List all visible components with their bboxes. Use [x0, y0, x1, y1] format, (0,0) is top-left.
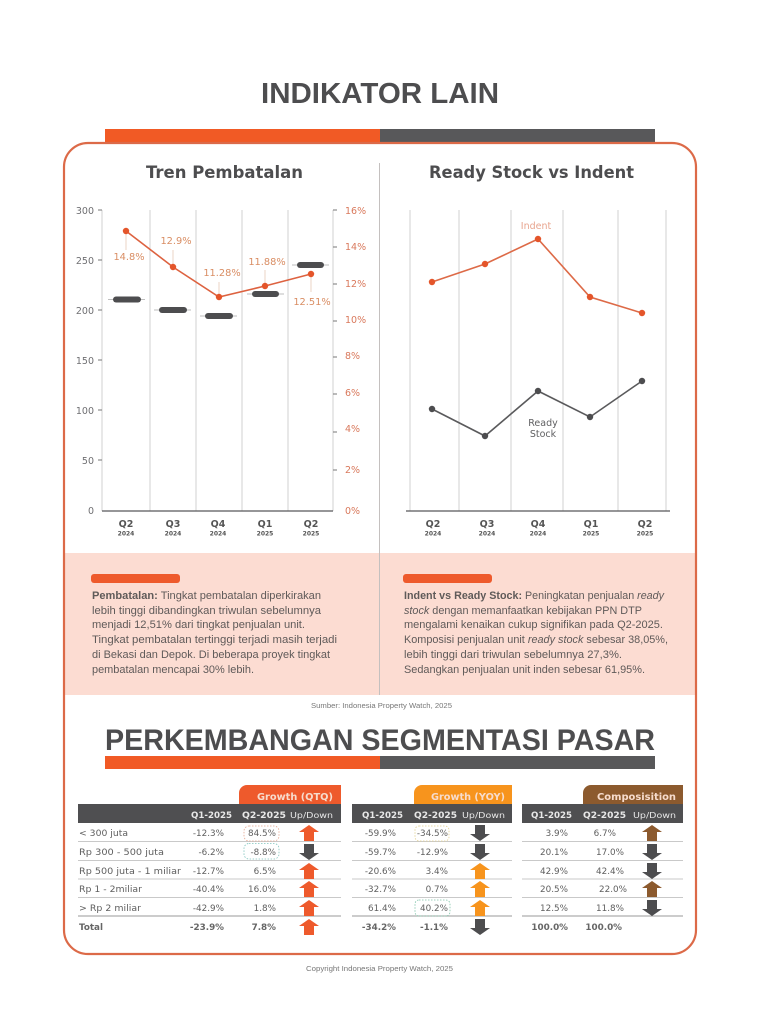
cancellation rate line — [123, 228, 314, 300]
Q1 values: -12.3% — [193, 829, 224, 839]
label: Ready Stock — [528, 418, 558, 440]
heading: Ready Stock vs Indent: Ready Stock vs Indent — [429, 163, 634, 183]
Q1 values: -34.2% — [362, 923, 396, 933]
Q2 values: 3.4% — [426, 867, 448, 877]
x axis labels: 2025 — [637, 530, 653, 538]
Q1 values: 12.5% — [540, 904, 568, 914]
tab: Composisition: Composisition — [597, 792, 676, 803]
x axis labels: 2024 — [479, 530, 495, 538]
Q2 values: 11.8% — [596, 904, 624, 914]
text block: Indent vs Ready Stock: Sedangkan penjualan unit inden sebesar 61,95%. — [404, 664, 645, 676]
unit bars — [113, 262, 324, 319]
Q2 values: -8.8% — [250, 848, 276, 858]
Q2 values: -12.9% — [417, 848, 448, 858]
left axis labels: 0 — [88, 506, 94, 517]
Q2 values: -34.5% — [417, 829, 448, 839]
left axis labels: 100 — [76, 406, 94, 417]
x axis labels: Q4 — [211, 519, 226, 530]
x axis labels: Q1 — [584, 519, 598, 530]
left axis labels: 300 — [76, 206, 94, 217]
tab: Growth (YOY): Growth (YOY) — [431, 792, 505, 803]
chart: Tren Pembatalan — [76, 206, 366, 538]
right axis labels: 2% — [345, 465, 360, 476]
text block: Pembatalan: Tingkat pembatalan tertinggi terjadi masih terjadi — [92, 634, 337, 646]
data labels: 12.9% — [160, 236, 192, 247]
Q1 values: 100.0% — [531, 923, 568, 933]
right axis labels: 14% — [345, 242, 366, 253]
Q1 values: 42.9% — [540, 867, 568, 877]
table header — [522, 804, 683, 823]
Q2 values: 84.5% — [248, 829, 276, 839]
Q2 values: 1.8% — [254, 904, 276, 914]
row labels: Total — [79, 923, 103, 933]
table header: Up/Down — [633, 811, 676, 820]
data labels: 11.88% — [248, 257, 286, 268]
text block: Pembatalan: Pembatalan: Tingkat pembatalan diperkirakan — [92, 590, 321, 602]
x axis labels: Q3 — [166, 519, 180, 530]
x axis labels: 2024 — [165, 530, 181, 538]
highlight: -8.8% — [244, 844, 279, 859]
Q2 values: 40.2% — [420, 904, 448, 914]
right axis labels — [345, 206, 366, 517]
table header: Q2-2025 — [242, 810, 286, 820]
Q2 values: 100.0% — [585, 923, 622, 933]
Q2 values — [417, 829, 448, 933]
left axis labels: 150 — [76, 356, 94, 367]
Q2 values: -1.1% — [420, 923, 448, 933]
x axis labels: 2025 — [257, 530, 273, 538]
x axis labels: 2024 — [210, 530, 226, 538]
copyright note: Copyright Indonesia Property Watch, 2025 — [306, 966, 453, 973]
Q2 values: 22.0% — [599, 885, 627, 895]
section bar — [105, 756, 655, 769]
right axis labels: 0% — [345, 506, 360, 517]
Q1 values: 3.9% — [546, 829, 568, 839]
highlight: -34.5% — [415, 826, 449, 841]
text block: Pembatalan: di Bekasi dan Depok. Di beberapa proyek tingkat — [92, 649, 330, 661]
text block: Pembatalan: lebih tinggi dibandingkan triwulan sebelumnya — [92, 605, 322, 617]
pink text panel background — [65, 553, 695, 695]
x axis labels: Q4 — [531, 519, 546, 530]
row labels — [79, 829, 181, 933]
panel divider — [378, 163, 380, 695]
table header: Q1-2025 — [191, 810, 232, 820]
text block: Indent vs Ready Stock: lebih tinggi dari triwulan sebelumnya 27,3%. — [404, 649, 622, 661]
x axis labels: 2024 — [530, 530, 546, 538]
text block: Indent vs Ready Stock — [403, 574, 668, 676]
left axis labels: 250 — [76, 256, 94, 267]
Q1 values — [190, 829, 224, 933]
Q2 values: 7.8% — [252, 923, 276, 933]
right axis labels: 12% — [345, 279, 366, 290]
Q1 values — [531, 829, 568, 933]
Q1 values — [362, 829, 396, 933]
label: Indent: Indent — [521, 221, 551, 232]
row labels: Rp 300 - 500 juta — [79, 848, 164, 858]
Q2 values: 6.7% — [594, 829, 616, 839]
source note: Sumber: Indonesia Property Watch, 2025 — [311, 703, 452, 710]
x axis labels: 2025 — [583, 530, 599, 538]
table header: Up/Down — [290, 811, 333, 820]
x axis labels: Q2 — [304, 519, 318, 530]
x axis labels: Q2 — [638, 519, 652, 530]
title: Indikator Lain: INDIKATOR LAIN — [261, 78, 499, 110]
heading: Tren Pembatalan: Tren Pembatalan — [146, 163, 303, 183]
leader lines — [126, 232, 311, 297]
table header: Q1-2025 — [362, 810, 403, 820]
data labels — [113, 236, 331, 308]
Q2 values: 16.0% — [248, 885, 276, 895]
highlight: 84.5% — [244, 826, 279, 841]
row labels: Rp 1 - 2miliar — [79, 885, 142, 895]
main rounded panel outline — [64, 143, 696, 954]
tab: Growth (YOY) — [414, 785, 512, 804]
data labels: 14.8% — [113, 252, 145, 263]
text block: Pembatalan: menjadi 12,51% dari tingkat penjualan unit. — [92, 619, 305, 631]
right axis labels: 10% — [345, 315, 366, 326]
x axis labels: 2024 — [425, 530, 441, 538]
row labels: Rp 500 juta - 1 miliar — [79, 867, 181, 877]
indent line — [429, 236, 645, 316]
data labels: 11.28% — [203, 268, 241, 279]
table header: Q1-2025 — [531, 810, 572, 820]
x axis labels: 2024 — [118, 530, 134, 538]
x axis labels: Q3 — [480, 519, 494, 530]
ready stock line — [429, 378, 645, 439]
header bar — [105, 129, 655, 143]
table: Growth QTQ — [78, 785, 341, 935]
left axis labels: 200 — [76, 306, 94, 317]
row labels: < 300 juta — [79, 829, 128, 839]
title: Perkembangan Segmentasi Pasar: PERKEMBANGAN SEGMENTASI PASAR — [105, 724, 655, 757]
x axis labels: Q2 — [426, 519, 440, 530]
text block: Indent vs Ready Stock: mengalami kenaikan cukup signifikan pada Q2-2025. — [404, 619, 663, 631]
tab: Composisition — [583, 785, 683, 804]
tab: Growth (QTQ): Growth (QTQ) — [257, 792, 333, 803]
Q2 values — [585, 829, 627, 933]
data labels: 12.51% — [293, 297, 331, 308]
label: Ready Stock: Stock — [530, 429, 557, 440]
label: Ready Stock: Ready — [528, 418, 558, 429]
chart: Ready Stock vs Indent — [406, 210, 670, 538]
arrows — [642, 825, 662, 916]
x axis labels — [425, 519, 653, 538]
table header: Up/Down — [462, 811, 505, 820]
text block: Indent vs Ready Stock: Komposisi penjualan unit ready stock sebesar 38,05%, — [404, 634, 668, 646]
table header: Q2-2025 — [414, 810, 457, 820]
Q1 values: -40.4% — [193, 885, 224, 895]
x axis labels: 2025 — [303, 530, 319, 538]
Q1 values: -23.9% — [190, 923, 224, 933]
x axis labels — [118, 519, 319, 538]
row labels: > Rp 2 miliar — [79, 904, 141, 914]
Q1 values: -20.6% — [365, 867, 396, 877]
Q1 values: -12.7% — [193, 867, 224, 877]
Q2 values: 42.4% — [596, 867, 624, 877]
text block: Indent vs Ready Stock: Indent vs Ready Stock: Peningkatan penjualan ready — [404, 590, 665, 602]
table header — [78, 804, 341, 823]
left axis labels — [76, 206, 94, 517]
table header: Q2-2025 — [583, 810, 626, 820]
text block: Pembatalan — [91, 574, 337, 676]
Q1 values: 61.4% — [368, 904, 396, 914]
highlight: 40.2% — [415, 900, 450, 916]
Q1 values: -59.7% — [365, 848, 396, 858]
arrows — [470, 825, 490, 935]
text block: Indent vs Ready Stock: stock dengan memanfaatkan kebijakan PPN DTP — [404, 605, 642, 617]
Q1 values: 20.5% — [540, 885, 568, 895]
x axis labels: Q2 — [119, 519, 133, 530]
right axis labels: 4% — [345, 424, 360, 435]
left axis labels: 50 — [82, 456, 94, 467]
Q2 values: 6.5% — [254, 867, 276, 877]
x axis labels: Q1 — [258, 519, 272, 530]
table: Composition — [522, 785, 683, 933]
table header — [352, 804, 512, 823]
arrows — [299, 825, 319, 935]
Q1 values: -59.9% — [365, 829, 396, 839]
Q1 values: -32.7% — [365, 885, 396, 895]
Q2 values: 17.0% — [596, 848, 624, 858]
text block: Pembatalan: pembatalan mencapai 30% lebih. — [92, 664, 254, 676]
Q1 values: 20.1% — [540, 848, 568, 858]
right axis labels: 8% — [345, 351, 360, 362]
Q1 values: -42.9% — [193, 904, 224, 914]
Q1 values: -6.2% — [198, 848, 224, 858]
Q2 values: 0.7% — [426, 885, 448, 895]
right axis labels: 6% — [345, 388, 360, 399]
table: Growth YOY — [352, 785, 512, 935]
right axis labels: 16% — [345, 206, 366, 217]
Q2 values — [248, 829, 276, 933]
tab: Growth (QTQ) — [239, 785, 341, 804]
